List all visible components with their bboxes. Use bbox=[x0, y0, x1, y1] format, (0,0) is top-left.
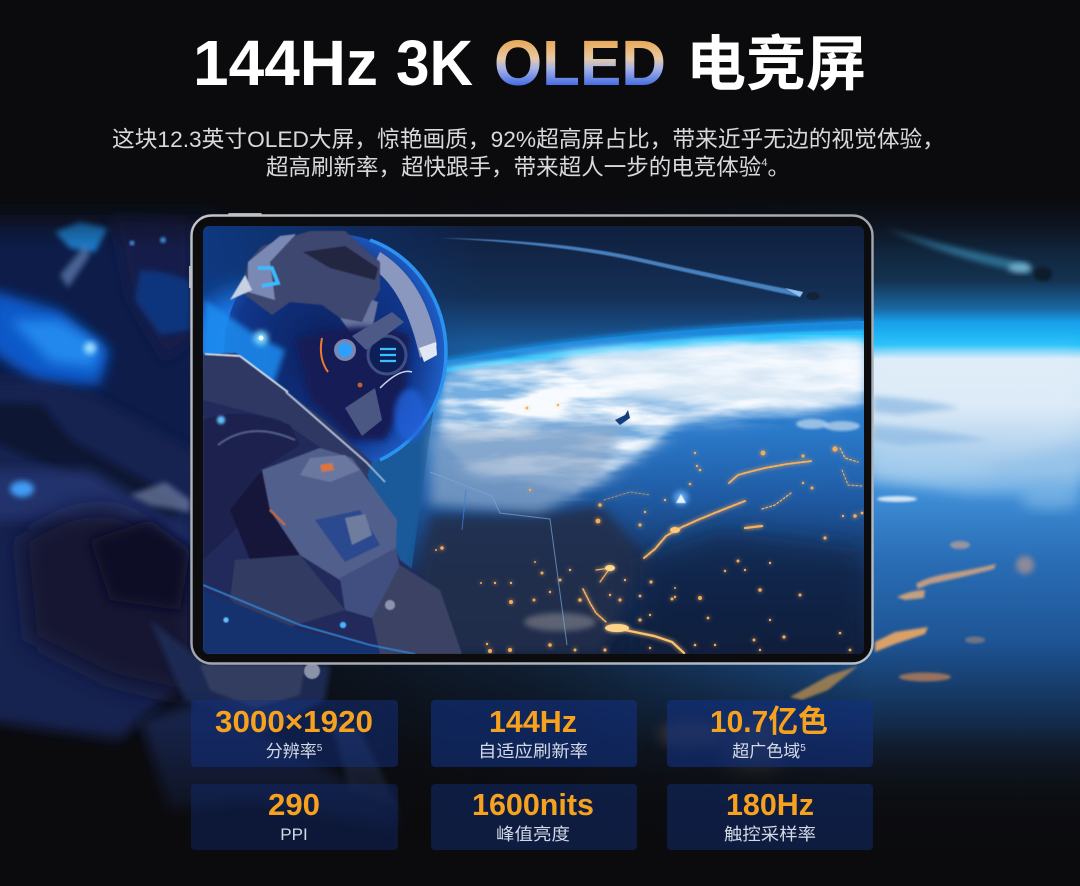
astronaut helmet bbox=[203, 231, 446, 470]
stat: PPI: PPI bbox=[280, 825, 308, 844]
stat: resolution bbox=[191, 700, 398, 767]
tablet side button bbox=[228, 213, 262, 216]
helmet face bbox=[296, 312, 426, 441]
stat: refresh rate: 自适应刷新率 bbox=[478, 742, 588, 761]
tablet bbox=[189, 213, 872, 664]
stat: peak brightness: 1600nits bbox=[472, 787, 594, 822]
earth bbox=[400, 319, 864, 654]
subtitle text: 这块12.3英寸OLED大屏，惊艳画质，92%超高屏占比，带来近乎无边的视觉体验， bbox=[112, 127, 945, 152]
stat: resolution: 3000×1920 bbox=[215, 704, 373, 739]
stat: colour gamut bbox=[667, 700, 873, 767]
subtitle text: 超高刷新率，超快跟手，带来超人一步的电竞体验 bbox=[266, 155, 761, 180]
stat cards bbox=[191, 700, 873, 850]
cloud band bbox=[430, 343, 864, 515]
city lights bbox=[435, 404, 863, 653]
background astronaut (left) bbox=[0, 215, 400, 830]
astronaut body bbox=[203, 353, 462, 654]
orange blurred city glows bbox=[790, 541, 1034, 700]
bright star flare bbox=[674, 491, 688, 505]
stat: touch sampling: 180Hz bbox=[726, 787, 814, 822]
stat: resolution: 分辨率 bbox=[266, 742, 317, 761]
subtitle text bbox=[112, 127, 945, 180]
dark land masses bbox=[400, 505, 864, 654]
stat: PPI: 290 bbox=[268, 787, 320, 822]
helmet armour bbox=[230, 231, 380, 332]
stat: colour gamut: 超广色域 bbox=[732, 742, 800, 761]
subtitle text: 。 bbox=[767, 155, 790, 180]
stat: touch sampling bbox=[667, 784, 873, 850]
subtitle text: 4 bbox=[761, 157, 767, 169]
title: 144Hz bbox=[193, 27, 378, 99]
stat: refresh rate bbox=[431, 700, 637, 767]
stat: PPI bbox=[191, 784, 398, 850]
background: blurred space scene bbox=[0, 208, 1080, 821]
title: OLED bbox=[494, 27, 666, 99]
stat: refresh rate: 144Hz bbox=[489, 704, 577, 739]
sparkles bbox=[203, 300, 285, 395]
meteor bbox=[440, 238, 820, 300]
stat: touch sampling: 触控采样率 bbox=[724, 825, 816, 844]
stat: colour gamut: 5 bbox=[800, 743, 806, 754]
blurred comet bbox=[885, 228, 1052, 281]
title bbox=[193, 27, 866, 99]
stat: resolution: 5 bbox=[317, 743, 323, 754]
stat: peak brightness: 峰值亮度 bbox=[496, 825, 570, 844]
stat: colour gamut: 10.7亿色 bbox=[710, 704, 828, 739]
title: 电竞屏 bbox=[686, 31, 866, 98]
title: 3K bbox=[396, 27, 473, 99]
tablet screen bbox=[190, 226, 864, 654]
stat: peak brightness bbox=[431, 784, 637, 850]
